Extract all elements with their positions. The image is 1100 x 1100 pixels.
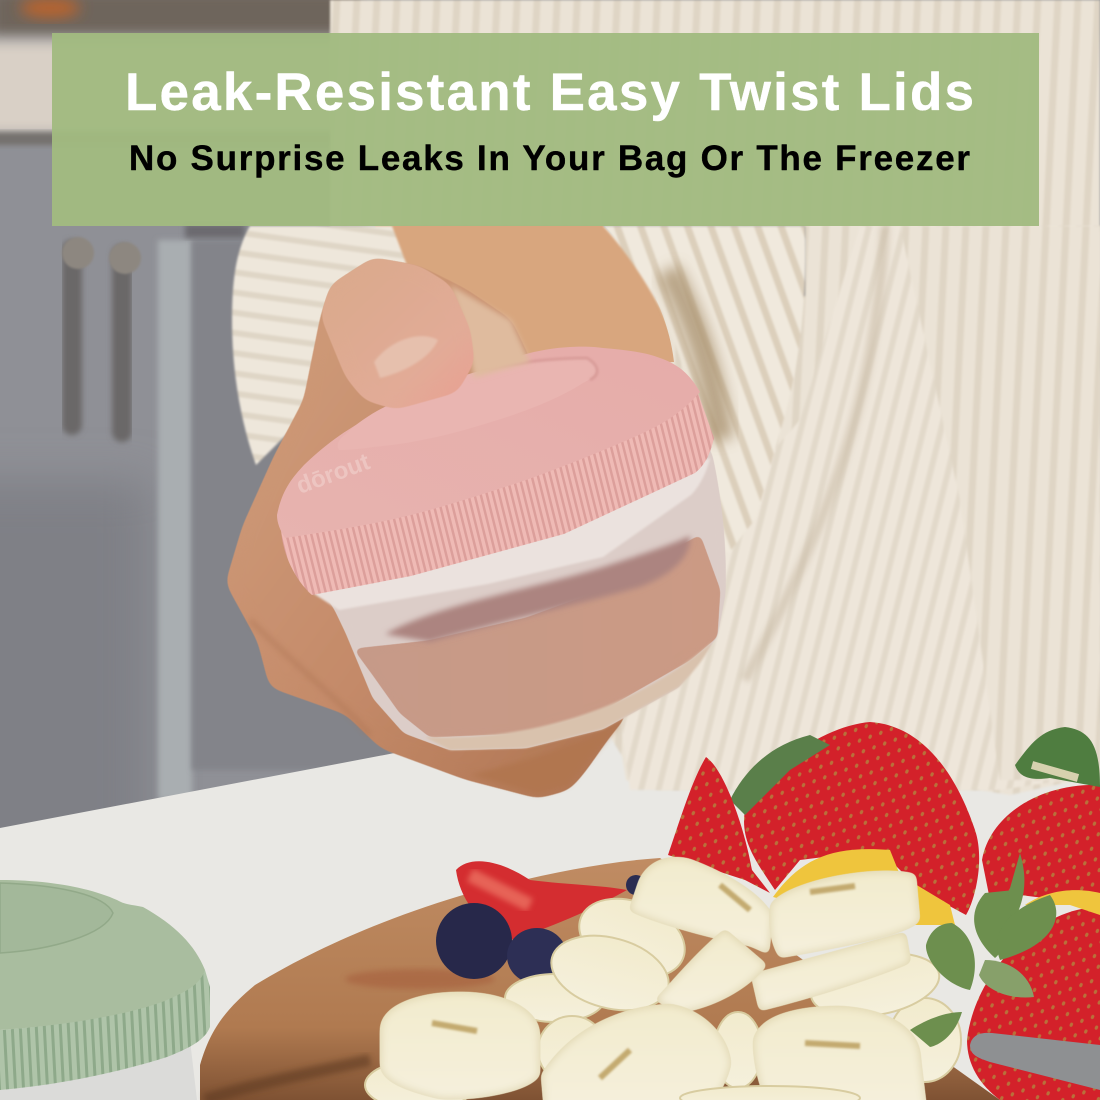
hand [226, 258, 626, 798]
strawberry: right [982, 785, 1100, 905]
strawberry: large back [744, 722, 979, 915]
banana centers [432, 885, 860, 1078]
blueberries [436, 903, 512, 979]
strawberry: front slice [668, 757, 770, 893]
lid brand mark: dōrout [293, 448, 373, 500]
jar glass [310, 430, 725, 750]
glass collar [308, 458, 710, 610]
sweater torso [330, 0, 1100, 795]
fruit plate [365, 722, 1100, 1100]
subtitle: No Surprise Leaks In Your Bag Or The Freezer [129, 139, 970, 178]
strawberry: large back leaves [730, 735, 830, 815]
title: Leak-Resistant Easy Twist Lids [125, 63, 974, 122]
banner [52, 33, 1039, 226]
banana slices [365, 858, 961, 1100]
lid inner disc [338, 358, 596, 450]
mango [773, 849, 955, 925]
forearm [375, 226, 674, 370]
lid ribbed skirt [281, 385, 714, 595]
palm fold beside thumb [450, 285, 530, 378]
table surface [0, 720, 1100, 1100]
strawberry: slice left [456, 861, 627, 940]
mango right [1025, 890, 1100, 915]
puree smear [385, 536, 690, 642]
knife [970, 1033, 1100, 1090]
sweater cuffs [232, 226, 806, 553]
green jar [0, 880, 210, 1100]
thumb over lid [321, 258, 474, 409]
lid top [277, 347, 700, 538]
pink jar [277, 258, 725, 750]
strawberry leaves [910, 853, 1056, 1047]
wooden board [200, 858, 1000, 1100]
strawberry: right leaves [1015, 727, 1100, 787]
puree filling [354, 535, 720, 737]
strawberry: front right [967, 907, 1100, 1100]
glass base [425, 642, 712, 750]
